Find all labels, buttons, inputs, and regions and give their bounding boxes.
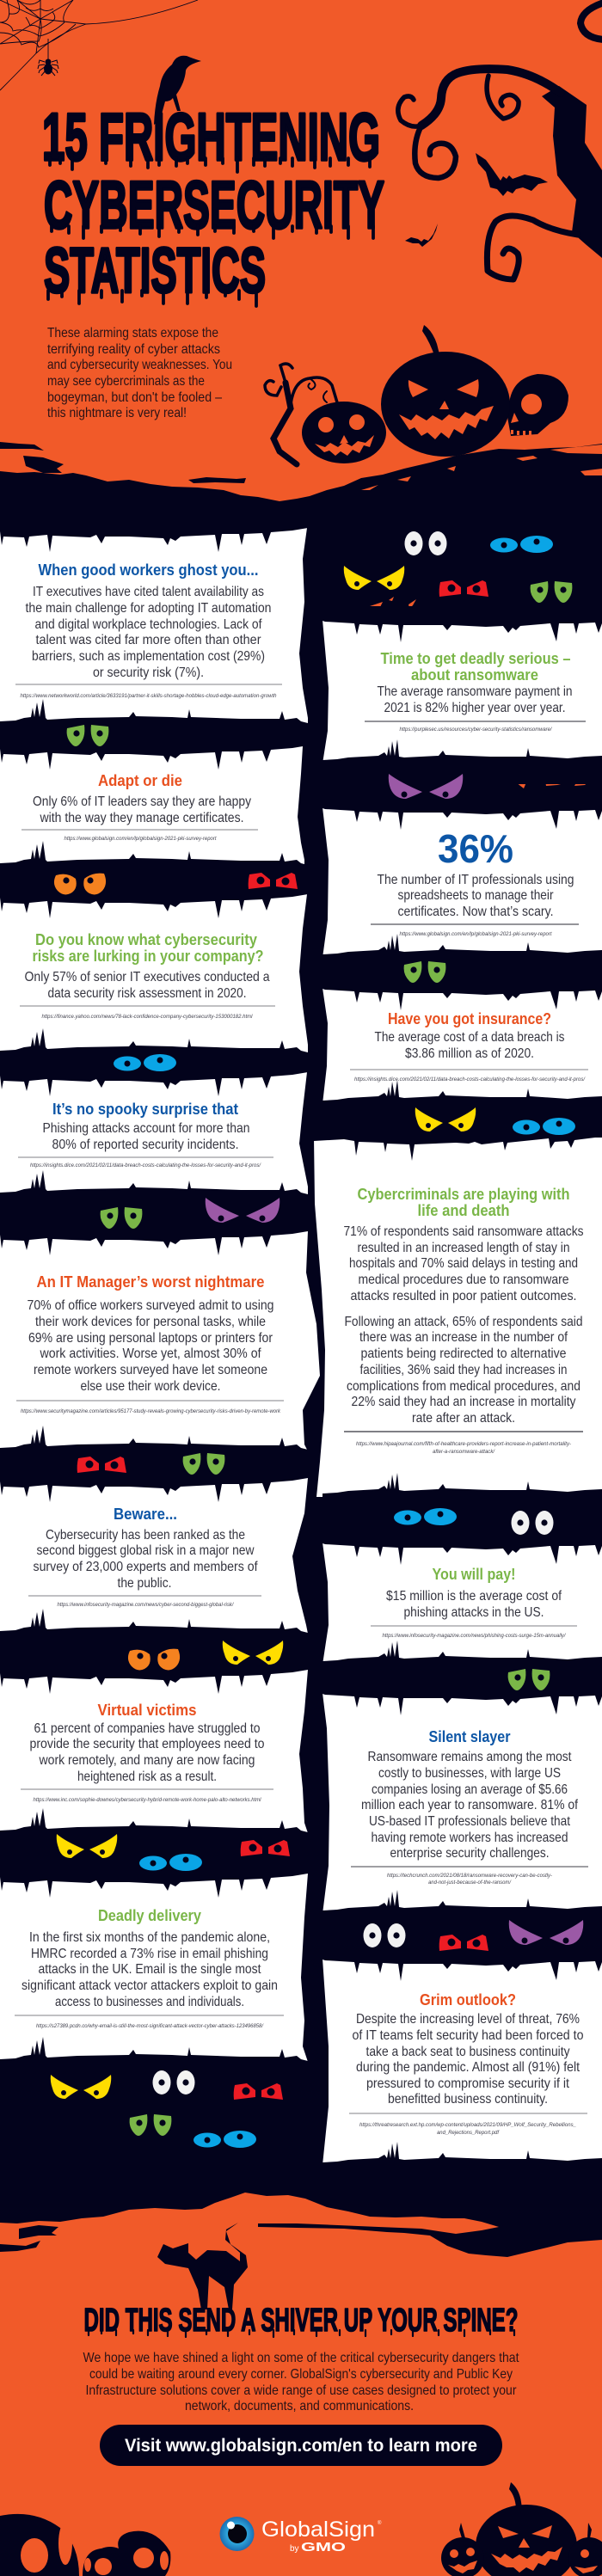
panel: an IT manager's worst nightmare <box>0 1221 320 1472</box>
heading: Do you know what cybersecurity <box>35 930 258 948</box>
body text: their work devices for personal tasks, while <box>35 1315 266 1329</box>
body text: 69% are using personal laptops or printers for <box>28 1331 273 1346</box>
title: 15 FRIGHTENING <box>42 99 380 175</box>
body text: there was an increase in the number of <box>359 1330 568 1345</box>
heading: It’s no spooky surprise that <box>52 1100 238 1118</box>
dark ground and middle background <box>0 444 602 2257</box>
body text: The average cost of a data breach is <box>375 1030 564 1045</box>
call to action button <box>100 2425 502 2466</box>
body text: data security risk assessment in 2020. <box>48 986 246 1001</box>
body text: survey of 23,000 experts and members of <box>33 1560 258 1574</box>
source link: https://www.infosecurity-magazine.com/news/cyber-second-biggest-global-risk/ <box>57 1602 235 1608</box>
source link: https://threatresearch.ext.hp.com/wp-content/uploads/2021/09/HP_Wolf_Security_Rebellions_ <box>359 2122 576 2128</box>
panel: beware <box>0 1468 308 1655</box>
heading: Adapt or die <box>98 771 182 789</box>
body text: $15 million is the average cost of <box>386 1589 562 1604</box>
intro text: and cybersecurity weaknesses. You <box>47 358 232 372</box>
source link: https://www.infosecurity-magazine.com/news/phishing-costs-surge-15m-annually/ <box>382 1633 567 1639</box>
tree <box>398 3 602 279</box>
body text: spreadsheets to manage their <box>397 888 554 903</box>
panel: virtual victims <box>0 1659 308 1855</box>
intro text: may see cybercriminals as the <box>47 374 205 389</box>
ground islands <box>0 442 246 483</box>
body text: provide the security that employees need to <box>29 1737 265 1751</box>
spider <box>38 39 58 76</box>
body text <box>344 1224 583 1426</box>
body text: attacks resulted in poor patient outcomes. <box>351 1289 576 1303</box>
panel: time to get deadly serious <box>322 606 602 784</box>
body text: patients being redirected to alternative <box>361 1346 567 1361</box>
cobweb <box>0 0 198 90</box>
closing text: Infrastructure solutions cover a wide range of use cases designed to protect your <box>86 2383 517 2398</box>
source link <box>387 1873 553 1886</box>
GlobalSign logo <box>220 2517 382 2555</box>
heading: Have you got insurance? <box>388 1009 551 1027</box>
body text: $3.86 million as of 2020. <box>405 1046 534 1061</box>
body text <box>361 1750 578 1861</box>
body text <box>33 794 251 825</box>
small pumpkin <box>302 402 386 463</box>
bat large <box>476 153 548 196</box>
body text <box>377 684 573 715</box>
panel: 36 percent <box>322 794 602 978</box>
black cat <box>157 2223 248 2309</box>
panel: do you know what cybersecurity risks <box>0 884 308 1075</box>
source link: https://www.globalsign.com/en/lp/globalsign-2021-pki-survey-report <box>64 836 218 842</box>
body text: 61 percent of companies have struggled to <box>34 1721 261 1736</box>
panel: you will pay <box>322 1529 602 1685</box>
body text: certificates. Now that’s scary. <box>397 905 554 919</box>
heading: Grim outlook? <box>420 1990 516 2009</box>
body text: with the way they manage certificates. <box>40 811 244 825</box>
body text: take a back seat to business continuity <box>366 2045 569 2059</box>
GlobalSign logo: ® <box>378 2520 382 2526</box>
heading: Beware... <box>114 1505 177 1523</box>
source link: https://purplesec.us/resources/cyber-security-statistics/ransomware/ <box>399 727 553 733</box>
body text: 70% of office workers surveyed admit to using <box>28 1298 273 1313</box>
source link: https://www.networkworld.com/article/3633191/partner-it-skills-shortage-hobbles-cloud-edge-automation-growth <box>21 693 277 699</box>
heading: about ransomware <box>411 665 538 684</box>
closing text <box>83 2351 519 2413</box>
body text: Ransomware remains among the most <box>368 1750 572 1764</box>
heading: Silent slayer <box>428 1727 511 1745</box>
intro text: terrifying reality of cyber attacks <box>47 342 220 357</box>
background: orange speckles <box>131 445 602 882</box>
body text: The average ransomware payment in <box>377 684 573 699</box>
body text: enterprise security challenges. <box>390 1846 549 1861</box>
crow on title <box>154 56 201 125</box>
bat small <box>405 224 438 247</box>
panel: adapt or die <box>0 735 308 887</box>
footer ground islands <box>0 2225 58 2252</box>
body text: benefitted business continuity. <box>388 2092 548 2107</box>
intro text: These alarming stats expose the <box>47 326 218 340</box>
title <box>42 99 384 306</box>
body text <box>386 1589 562 1620</box>
body text: attacks in the UK. Email is the single most <box>38 1962 261 1977</box>
heading: An IT Manager’s worst nightmare <box>36 1273 265 1291</box>
intro text: this nightmare is very real! <box>47 406 187 420</box>
intro text: bogeyman, but don't be fooled – <box>47 390 222 405</box>
source link <box>356 1441 572 1455</box>
source link: https://www.securitymagazine.com/articles/95177-study-reveals-growing-cybersecurity-risks-driven-by-remote-work <box>21 1408 281 1414</box>
big statistic: 36% <box>438 826 513 871</box>
heading: You will pay! <box>432 1565 516 1583</box>
GlobalSign logo: GMO <box>301 2540 346 2555</box>
eyes in the dark <box>51 531 583 2148</box>
body text: medical procedures due to ransomware <box>358 1273 569 1287</box>
body text: In the first six months of the pandemic alone, <box>29 1930 270 1945</box>
body text: rate after an attack. <box>412 1411 515 1426</box>
body text: work remotely, and many are now facing <box>39 1753 255 1768</box>
body text: IT executives have cited talent availability as <box>33 585 264 599</box>
body text: Only 6% of IT leaders say they are happy <box>33 794 251 809</box>
body text: heightened risk as a result. <box>77 1769 217 1784</box>
body text: facilities, 36% said they had increases in <box>359 1363 568 1377</box>
heading: Time to get deadly serious – <box>380 649 571 667</box>
heading: Virtual victims <box>98 1701 196 1719</box>
source link: https://www.globalsign.com/en/lp/globalsign-2021-pki-survey-report <box>399 931 553 937</box>
heading: Cybercriminals are playing with <box>358 1185 569 1203</box>
skull <box>507 374 568 436</box>
body text: or security risk (7%). <box>93 665 204 680</box>
body text: work activities. Worse yet, almost 30% of <box>40 1346 261 1361</box>
GlobalSign logo: GlobalSign <box>261 2518 375 2542</box>
heading <box>358 1185 569 1219</box>
heading: When good workers ghost you... <box>38 561 258 579</box>
body text: barriers, such as implementation cost (29%) <box>32 649 265 664</box>
body text <box>28 1298 273 1394</box>
source link <box>359 2122 576 2136</box>
title: STATISTICS <box>44 235 266 306</box>
closing text: network, documents, and communications. <box>185 2399 414 2413</box>
panel: grim outlook <box>322 1945 602 2187</box>
intro text <box>47 326 232 420</box>
body text: companies losing an average of $5.66 <box>372 1782 568 1797</box>
source link: and-not-just-because-of-the-ransom/ <box>428 1880 512 1886</box>
panel: silent slayer <box>322 1679 602 1935</box>
body text: remote workers surveyed have let someone <box>34 1363 267 1377</box>
title: CYBERSECURITY <box>44 167 384 242</box>
source link: https://www.hipaajournal.com/fifth-of-healthcare-providers-report-increase-in-patient-mortality- <box>356 1441 572 1447</box>
source link: after-a-ransomware-attack/ <box>433 1449 495 1455</box>
body text <box>377 873 574 919</box>
heading: life and death <box>418 1201 509 1219</box>
skulls bottom left <box>0 2514 170 2576</box>
body text: talent was cited far more often than other <box>36 633 261 647</box>
body text: Only 57% of senior IT executives conducted a <box>24 970 270 984</box>
body text: having remote workers has increased <box>372 1831 568 1845</box>
panel: when good workers ghost you <box>0 518 308 745</box>
panel: have you got insurance <box>322 974 602 1125</box>
pumpkins bottom right <box>441 2482 602 2576</box>
body text: pressured to compromise security if it <box>366 2076 569 2091</box>
body text: 80% of reported security incidents. <box>52 1138 239 1152</box>
closing text: We hope we have shined a light on some of the critical cybersecurity dangers that <box>83 2351 519 2365</box>
large pumpkin <box>381 325 510 457</box>
body text: resulted in an increased length of stay in <box>358 1241 569 1255</box>
panel: no spooky surprise <box>0 1062 308 1217</box>
source link: https://www.inc.com/sophie-downes/cybersecurity-hybrid-remote-work-home-palo-alto-networks.html <box>33 1797 261 1803</box>
body text <box>24 970 270 1001</box>
call to action button: Visit www.globalsign.com/en to learn more <box>125 2436 477 2456</box>
body text: phishing attacks in the US. <box>404 1605 544 1620</box>
source link: https://finance.yahoo.com/news/78-lack-confidence-company-cybersecurity-153000182.html <box>41 1014 253 1020</box>
body text: HMRC recorded a 73% rise in email phishing <box>31 1947 268 1961</box>
body text: costly to businesses, with large US <box>378 1766 561 1781</box>
body text: access to businesses and individuals. <box>55 1995 244 2009</box>
closing text: could be waiting around every corner. GlobalSign's cybersecurity and Public Key <box>89 2367 513 2382</box>
heading <box>33 930 263 965</box>
body text <box>22 1930 278 2009</box>
heading: risks are lurking in your company? <box>33 947 263 965</box>
body text: Cybersecurity has been ranked as the <box>46 1528 245 1543</box>
dead tree <box>265 364 337 464</box>
body text: significant attack vector attackers exploit to gain <box>22 1978 278 1993</box>
body text: the public. <box>117 1576 172 1591</box>
body text: second biggest global risk in a major new <box>36 1543 255 1558</box>
body text <box>43 1121 249 1152</box>
source link: https://s27389.pcdn.co/why-email-is-still-the-most-significant-attack-vector-cyber-attacks-123496858/ <box>36 2023 264 2029</box>
body text: the main challenge for adopting IT automation <box>26 601 272 616</box>
panel: cybercriminals are playing with life and death <box>314 1118 602 1518</box>
GlobalSign logo: by <box>290 2544 299 2554</box>
body text: and digital workplace technologies. Lack of <box>34 617 262 632</box>
source link: https://insights.dice.com/2021/02/11/data-breach-costs-calculating-the-losses-for-security-and-it-pros/ <box>30 1162 261 1168</box>
body text: The number of IT professionals using <box>377 873 574 887</box>
body text: Phishing attacks account for more than <box>43 1121 249 1136</box>
panel: deadly delivery <box>0 1863 308 2083</box>
body text: else use their work device. <box>81 1379 220 1394</box>
heading <box>380 649 571 684</box>
body text: US-based IT professionals believe that <box>369 1814 570 1829</box>
body text <box>353 2012 584 2107</box>
heading: Deadly delivery <box>98 1906 202 1924</box>
source link: and_Rejections_Report.pdf <box>437 2130 500 2136</box>
body text <box>29 1721 265 1784</box>
source link: https://insights.dice.com/2021/02/11/data-breach-costs-calculating-the-losses-for-security-and-it-pros/ <box>354 1076 586 1083</box>
source link: https://techcrunch.com/2021/08/18/ransomware-recovery-can-be-costly- <box>387 1873 553 1879</box>
body text <box>33 1528 258 1591</box>
body text: 2021 is 82% higher year over year. <box>384 701 566 715</box>
body text <box>26 585 272 680</box>
body text <box>375 1030 564 1061</box>
